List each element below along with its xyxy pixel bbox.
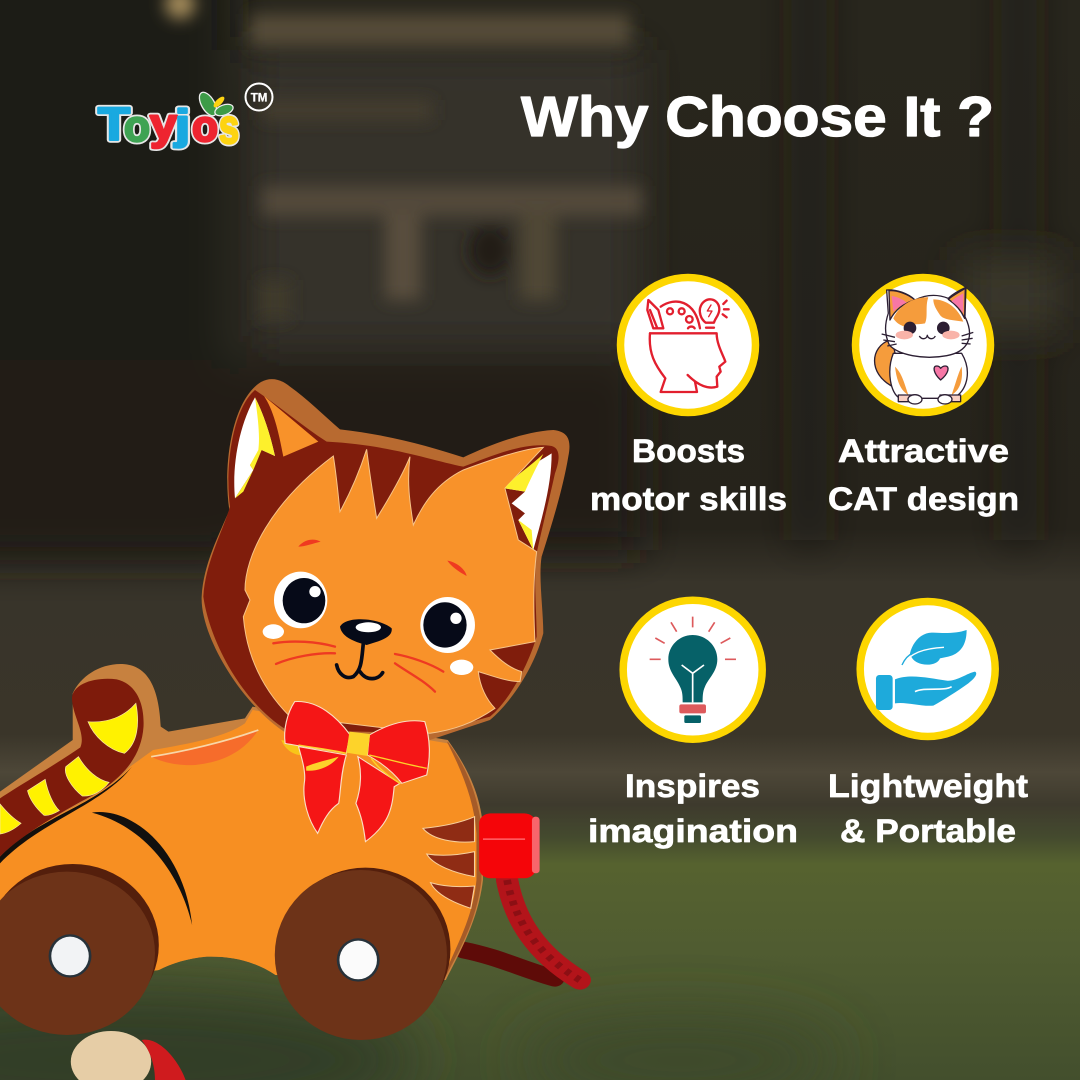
whiskers [273, 642, 443, 692]
logo: Toyjos with TM mark [98, 84, 272, 154]
logo wordmark [98, 98, 239, 154]
icon: head with ideas [620, 278, 756, 412]
nose and mouth [337, 619, 392, 679]
icon: cartoon cat [856, 278, 990, 412]
logo wordmark: y [150, 100, 178, 149]
logo leaves [196, 89, 235, 119]
face orange [243, 447, 543, 733]
cat pull cord and peg [71, 880, 580, 1080]
logo wordmark: o [192, 102, 218, 151]
right ear inner [505, 453, 552, 550]
title: Why Choose It ? [521, 85, 994, 149]
side stripes [423, 817, 475, 908]
logo wordmark: s [219, 101, 239, 154]
logo wordmark: T [98, 98, 130, 150]
feature: attractive cat design [828, 278, 1019, 517]
label: Attractive [838, 433, 1009, 469]
feature: boosts motor skills [590, 278, 787, 517]
label: CAT design [828, 481, 1019, 517]
head brown markings [203, 390, 559, 733]
logo wordmark: s [219, 101, 239, 154]
front wheel [275, 868, 450, 1040]
logo wordmark: y [150, 100, 178, 149]
cat head [202, 379, 569, 740]
head wood edge [202, 379, 569, 740]
logo wordmark: o [124, 102, 150, 151]
cat body [0, 664, 483, 993]
left eye [274, 572, 327, 628]
label [828, 433, 1019, 517]
label [590, 433, 787, 517]
icon: hand with feather [860, 602, 995, 736]
logo wordmark: o [124, 102, 150, 151]
left ear inner [264, 396, 318, 457]
label: Inspires [625, 768, 760, 804]
rear wheel [0, 864, 159, 1035]
feature: lightweight and portable [828, 602, 1028, 849]
label: Boosts [632, 433, 745, 469]
cat wheels [0, 813, 540, 1040]
label [828, 768, 1028, 849]
red axle cap [479, 813, 540, 878]
logo wordmark: T [98, 98, 130, 150]
icon: light bulb [623, 600, 762, 739]
cheeks [263, 624, 473, 675]
streak marks [92, 730, 258, 925]
label: & Portable [840, 813, 1016, 849]
trademark badge [246, 84, 272, 110]
logo wordmark: j [174, 101, 190, 148]
label: imagination [588, 813, 798, 849]
feature: inspires imagination [588, 600, 798, 849]
label [588, 768, 798, 849]
logo wordmark: j [174, 101, 190, 148]
logo wordmark: o [192, 102, 218, 151]
trademark badge: TM [251, 92, 267, 104]
label: Lightweight [828, 768, 1028, 804]
eyebrows [298, 540, 467, 576]
cat tail [0, 679, 144, 863]
toy cat [0, 379, 580, 1080]
right eye [420, 597, 475, 653]
red bow [281, 702, 429, 842]
label: motor skills [590, 481, 787, 517]
